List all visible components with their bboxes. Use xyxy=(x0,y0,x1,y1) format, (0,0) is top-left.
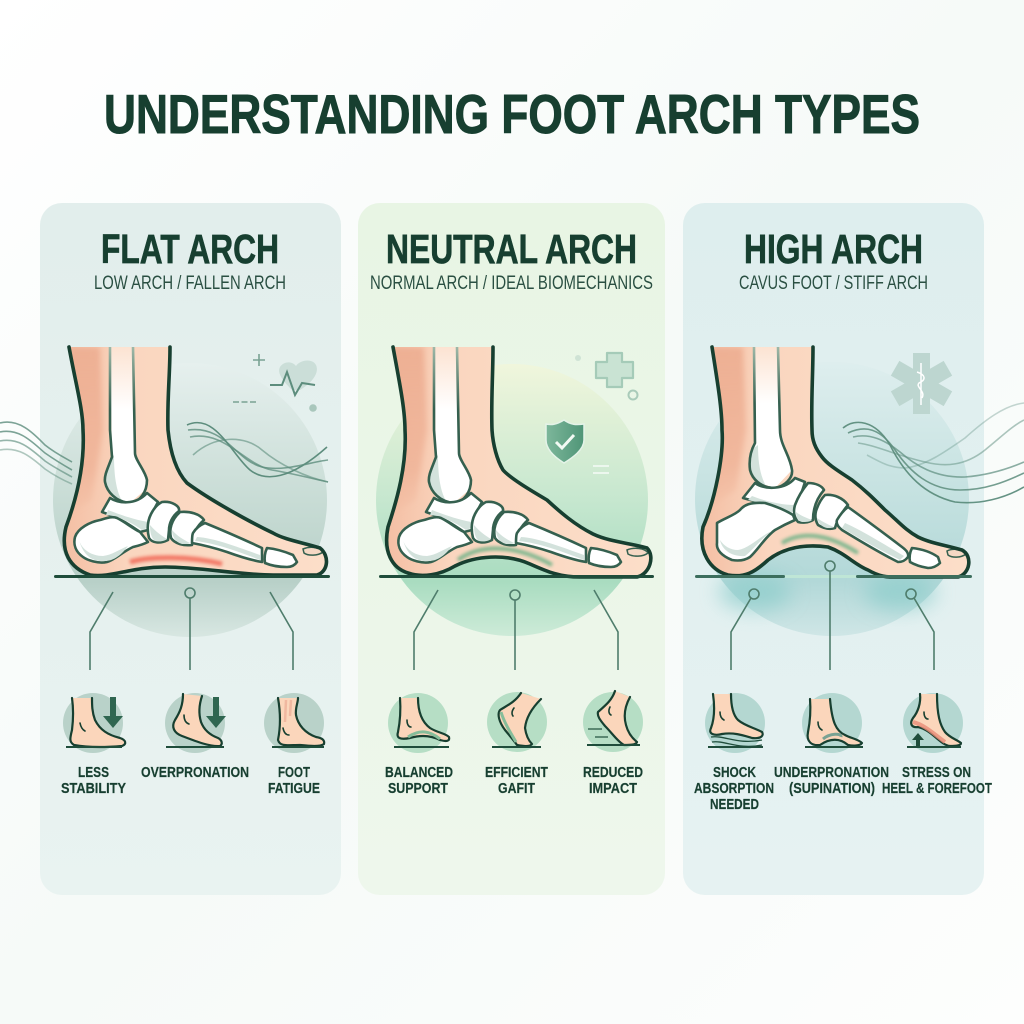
callout connectors: flat xyxy=(90,588,293,670)
panel: high arch xyxy=(683,203,1024,895)
heading: neutral arch: NEUTRAL ARCH xyxy=(386,226,637,272)
benefit: less stability xyxy=(61,693,126,797)
heading: high arch: HIGH ARCH xyxy=(744,226,923,272)
subheading: flat arch: LOW ARCH / FALLEN ARCH xyxy=(94,273,286,294)
icon: medical cross xyxy=(575,353,638,400)
benefit: shock absorption needed xyxy=(694,693,774,813)
small dashes xyxy=(593,466,609,473)
panel: neutral arch xyxy=(358,203,665,895)
panel: flat arch xyxy=(0,203,341,895)
benefit: less stability: LESS xyxy=(78,765,109,781)
benefit: overpronation xyxy=(141,693,249,781)
icon: shield check xyxy=(546,420,584,463)
benefit: overpronation: OVERPRONATION xyxy=(141,765,249,781)
benefit: stress on heel and forefoot xyxy=(882,693,992,797)
benefit: efficient gait: GAFIT xyxy=(498,781,535,797)
benefit: foot fatigue xyxy=(264,693,324,797)
ground line: neutral xyxy=(379,575,654,578)
icon: heart and pulse xyxy=(233,354,317,412)
icon: medical star xyxy=(891,353,952,414)
backdrop circle: high xyxy=(695,393,969,636)
benefit: reduced impact: IMPACT xyxy=(589,781,637,797)
foot illustration: flat xyxy=(60,347,326,576)
benefit: stress on heel and forefoot: STRESS ON xyxy=(902,765,971,781)
benefit: foot fatigue: FOOT xyxy=(278,765,310,781)
decorative waves left: flat xyxy=(0,422,72,484)
backdrop circle: neutral xyxy=(376,364,648,636)
benefit: shock absorption needed: ABSORPTION xyxy=(694,781,774,797)
benefit: underpronation: UNDERPRONATION xyxy=(774,765,889,781)
decorative waves: high xyxy=(843,403,1024,503)
benefit: balanced support: BALANCED xyxy=(385,765,453,781)
heading: flat arch: FLAT ARCH xyxy=(101,226,279,272)
benefit: shock absorption needed: NEEDED xyxy=(710,797,759,813)
benefit: underpronation xyxy=(774,693,889,797)
benefit: shock absorption needed: SHOCK xyxy=(713,765,756,781)
benefit: less stability: STABILITY xyxy=(61,781,126,797)
decorative waves right: flat xyxy=(187,423,328,482)
ground line: flat xyxy=(54,575,330,578)
benefit: reduced impact: REDUCED xyxy=(583,765,643,781)
benefit: efficient gait xyxy=(485,692,548,797)
subheading: high arch: CAVUS FOOT / STIFF ARCH xyxy=(739,273,928,294)
callout connectors: neutral xyxy=(414,590,618,670)
benefit: foot fatigue: FATIGUE xyxy=(268,781,320,797)
benefit: underpronation: (SUPINATION) xyxy=(789,781,875,797)
benefit: stress on heel and forefoot: HEEL & FOREFOOT xyxy=(882,781,992,797)
foot illustration: high xyxy=(700,347,969,577)
subheading: neutral arch: NORMAL ARCH / IDEAL BIOMECHANICS xyxy=(370,273,653,294)
benefit: balanced support: SUPPORT xyxy=(388,781,448,797)
benefit: efficient gait: EFFICIENT xyxy=(485,765,548,781)
benefit: reduced impact xyxy=(583,691,643,797)
foot illustration: neutral xyxy=(384,347,651,577)
backdrop circle: flat xyxy=(53,409,327,637)
ground line: high xyxy=(695,575,972,578)
ground glow: high xyxy=(719,574,936,610)
benefit: balanced support xyxy=(385,693,453,797)
callout connectors: high xyxy=(731,561,934,670)
